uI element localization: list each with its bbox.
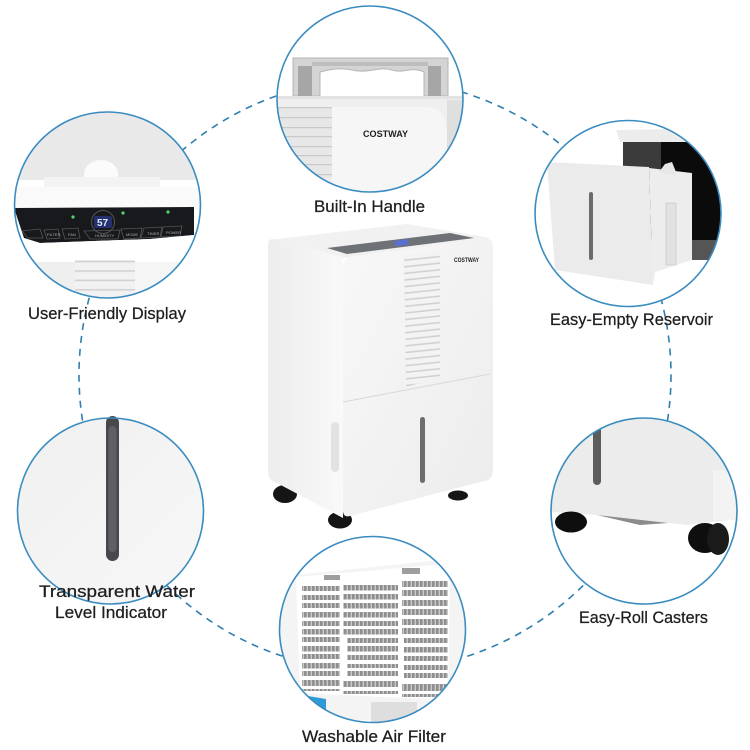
label: washable air filter: Washable Air Filter: [302, 728, 447, 746]
front face: [343, 238, 493, 516]
top face: [268, 224, 491, 258]
handle: [293, 58, 448, 96]
logo: COSTWAY: [454, 257, 480, 264]
side face: [268, 239, 343, 518]
control panel: TIMER: [147, 231, 160, 236]
control panel: MODE: [126, 232, 138, 237]
label: built-in handle: Built-In Handle: [314, 198, 425, 216]
panel: washable air filter: [280, 536, 466, 724]
panel: built-in handle: [270, 6, 470, 196]
tank divider: [343, 374, 490, 402]
control panel: HUMIDITY: [95, 233, 115, 238]
control strip: [327, 233, 474, 254]
control panel: FILTER: [47, 232, 61, 237]
main product: dehumidifier: [268, 224, 493, 528]
control panel: [14, 207, 194, 243]
control panel: POWER: [166, 230, 181, 235]
casters: [555, 512, 729, 555]
vent: [404, 251, 440, 387]
tank front: [547, 162, 653, 285]
panel: easy-roll casters: [545, 410, 745, 604]
panel: user-friendly display: [14, 111, 202, 299]
wheels: [273, 485, 468, 528]
dashed connector ring: [79, 79, 671, 671]
label: easy-roll casters: Easy-Roll Casters: [579, 609, 708, 627]
side handle recess: [331, 422, 339, 472]
label: easy-empty reservoir: Easy-Empty Reservoir: [550, 311, 713, 329]
label: transparent water level indicator: Transparent Water: [39, 583, 196, 601]
label: user-friendly display: User-Friendly Display: [28, 305, 187, 323]
filter mesh: [302, 581, 448, 697]
panel: transparent water level indicator: [18, 416, 204, 604]
tank side: [649, 168, 692, 285]
water level indicator: [420, 417, 425, 483]
logo: COSTWAY: [363, 129, 408, 139]
water level window: [106, 416, 119, 561]
control panel: 57: [97, 218, 109, 229]
label: transparent water level indicator: Level Indicator: [55, 604, 168, 622]
control panel: FAN: [68, 232, 76, 237]
panel: easy-empty reservoir: [535, 120, 733, 306]
